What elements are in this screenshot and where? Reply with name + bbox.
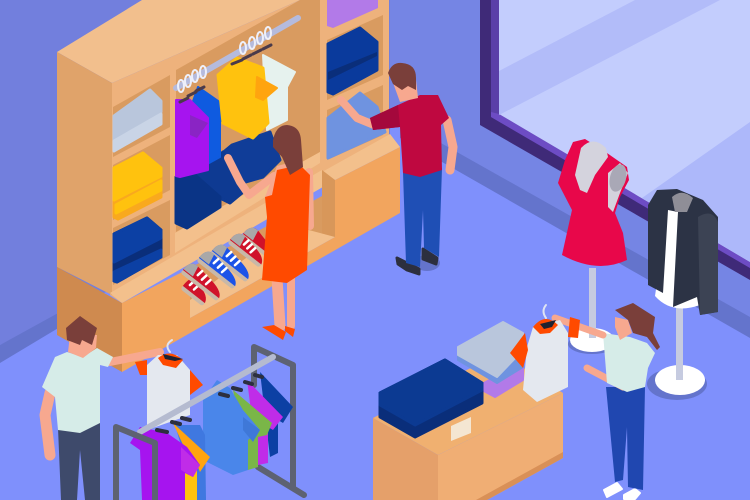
rack: yellow strip xyxy=(185,470,197,500)
shelving: base front xyxy=(122,147,400,372)
stack: right navy xyxy=(328,28,377,94)
mannequin: arm opening xyxy=(608,163,628,212)
rack: blue back tee xyxy=(175,425,206,500)
mannequin: arm stump xyxy=(607,162,629,194)
mannequin: black jacket xyxy=(648,189,718,315)
woman: dress xyxy=(262,165,310,283)
mannequin: white shirt xyxy=(655,205,700,308)
woman in orange dress xyxy=(228,125,310,340)
man in red shirt xyxy=(341,63,453,274)
shelving: right column backs xyxy=(327,15,383,160)
man with white tee xyxy=(42,316,160,500)
rack: green tee xyxy=(233,390,272,470)
woman sales assistant xyxy=(555,303,660,499)
man: shadow xyxy=(414,255,440,271)
table: top xyxy=(373,353,563,455)
clothes rack xyxy=(116,347,304,500)
woman: hair xyxy=(273,125,303,175)
rack: hangers xyxy=(157,375,262,432)
man: left arm xyxy=(45,393,50,455)
man: shirt xyxy=(370,95,449,177)
man: head xyxy=(388,63,418,102)
rack: purple tee xyxy=(247,380,283,465)
right wall xyxy=(390,0,750,338)
left wall xyxy=(0,0,390,363)
shelving: left column backs xyxy=(113,75,170,285)
shop window xyxy=(480,0,750,280)
hanging white tee xyxy=(263,55,295,130)
shelving: base side xyxy=(57,267,122,372)
mannequin: base shadow xyxy=(647,368,707,400)
mannequin with black jacket xyxy=(647,189,718,400)
shelving: side face xyxy=(57,52,112,295)
assistant: jeans xyxy=(606,387,645,490)
table: price tag xyxy=(451,417,471,441)
rack: sleeve xyxy=(181,447,200,477)
mannequin: torso xyxy=(575,142,608,193)
table: lip xyxy=(476,452,563,500)
stack: yellow shirts xyxy=(114,153,161,219)
mannequin: red dress xyxy=(558,139,629,266)
man: trousers xyxy=(403,168,442,267)
rack: orange tee xyxy=(173,423,210,472)
hanging yellow tee xyxy=(218,58,277,138)
mannequin: base xyxy=(655,365,705,395)
rack: purple front tee xyxy=(130,427,200,500)
woman: arms xyxy=(228,158,310,226)
mannequin: neck xyxy=(672,193,693,212)
rack: rear frame xyxy=(254,347,304,495)
man: shirt xyxy=(42,348,113,433)
shelving: frame xyxy=(110,0,389,303)
mannequin: sleeve xyxy=(698,213,718,315)
clothes rail xyxy=(176,18,298,102)
man: shoes xyxy=(397,249,437,274)
stack: blue shirts xyxy=(114,218,161,282)
hanging blue tee xyxy=(190,87,228,168)
assistant: lower arm xyxy=(587,363,643,387)
woman: shoes xyxy=(262,325,295,340)
assistant: tee xyxy=(603,333,655,392)
shelving: top face xyxy=(57,0,300,83)
table: grey folded stack xyxy=(458,322,523,397)
man: trousers xyxy=(58,423,100,500)
shelving: base top xyxy=(110,170,335,303)
man: arms xyxy=(341,100,453,170)
rack: blue tee xyxy=(203,380,260,475)
assistant: head and hair xyxy=(615,303,660,350)
table: left face xyxy=(373,418,438,500)
hanging purple tee xyxy=(176,100,208,177)
shoes xyxy=(180,224,275,306)
rack: navy tee xyxy=(260,372,293,457)
man: right arm xyxy=(110,352,160,362)
jeans stacks xyxy=(176,132,280,228)
mannequin with red dress xyxy=(558,139,629,354)
rack: rail xyxy=(140,357,273,432)
mannequin: pole xyxy=(589,268,596,338)
tee on table hanger xyxy=(510,305,580,402)
table xyxy=(373,322,563,500)
man: head xyxy=(66,316,97,358)
shelving: shoe niche xyxy=(190,196,335,318)
man: sleeve xyxy=(370,105,400,130)
table: right face xyxy=(438,393,563,500)
woman: back skin xyxy=(265,160,300,198)
stack: right light blue xyxy=(328,93,385,158)
table: navy folded stack xyxy=(380,360,482,437)
wooden shelving unit xyxy=(57,0,400,372)
woman: legs xyxy=(277,278,291,326)
mannequin: base xyxy=(570,328,614,352)
tee on hanger held by man xyxy=(135,340,203,430)
stack: right purple xyxy=(327,0,378,28)
stack: light grey shirts xyxy=(114,90,161,151)
shelving: centre compartment xyxy=(176,0,320,232)
rack: front frame xyxy=(116,427,155,500)
mannequin: pole xyxy=(676,305,683,380)
mannequin: base shadow xyxy=(568,334,616,354)
assistant: upper arm xyxy=(555,318,603,335)
assistant: shoes xyxy=(604,483,640,499)
